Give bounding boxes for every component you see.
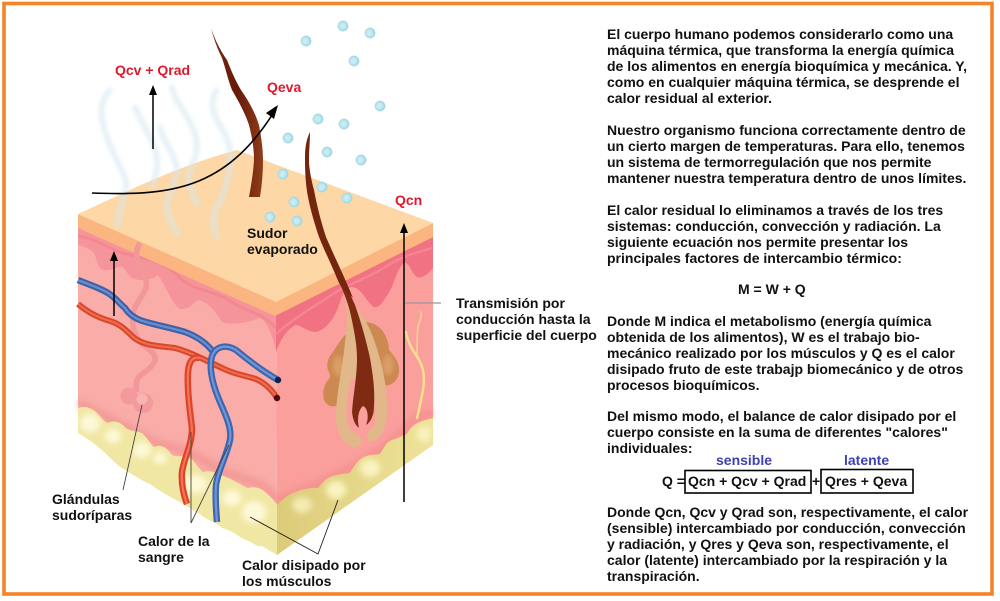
blood vessels: vein [78, 280, 281, 522]
label: Glándulas sudoríparas: Glándulas [52, 491, 120, 507]
text block: definitions: calor (latente) intercambiado por la respiración y la [607, 552, 947, 568]
arrow: Qcv + Qrad [149, 85, 157, 149]
equation: M = W + Q: M = W + Q [738, 281, 806, 297]
root sheath [336, 298, 387, 447]
arrow: internal heat [110, 251, 118, 316]
text block: heat balance: Del mismo modo, el balance de calor disipado por el [607, 408, 956, 424]
text block: metabolism: mecánico realizado por los músculos y Q es el calor [607, 345, 955, 361]
text block: intro: como en cualquier máquina térmica, se desprende el [607, 74, 959, 90]
text block: residual heat: principales factores de intercambio térmico: [607, 250, 902, 266]
text block: definitions: y radiación, y Qres y Qeva son, respectivamente, el [607, 536, 949, 552]
label: Qcn: Qcn [395, 192, 422, 208]
text block: metabolism: obtenida de los alimentos), W es el trabajo bio- [607, 329, 920, 345]
hair shaft right [305, 132, 353, 298]
top surface [78, 150, 433, 302]
text block: thermoregulation: Nuestro organismo funciona correctamente dentro de [607, 122, 966, 138]
sweat droplets [265, 21, 385, 226]
text block: heat balance: cuerpo consiste en la suma de diferentes "calores" [607, 424, 948, 440]
hair inside follicle [336, 276, 374, 428]
text block: metabolism: Donde M indica el metabolismo (energía química [607, 313, 931, 329]
heat waves [102, 87, 230, 237]
label: Transmisión: conducción hasta la [456, 311, 591, 327]
text block: residual heat: sistemas: conducción, convección y radiación. La [607, 218, 941, 234]
text block: thermoregulation: un cierto margen de temperaturas. Para ello, tenemos [607, 138, 965, 154]
label: Transmisión: Transmisión por [456, 295, 565, 311]
fat layer right [277, 418, 433, 555]
text block: residual heat: siguiente ecuación nos permite presentar los [607, 234, 908, 250]
nerve [406, 312, 424, 418]
label: Glándulas sudoríparas: sudoríparas [52, 507, 132, 523]
label: Calor disipado: Calor disipado por [242, 557, 366, 573]
text block: residual heat: El calor residual lo eliminamos a través de los tres [607, 202, 943, 218]
label: Calor de la sangre: Calor de la [138, 533, 210, 549]
text block: definitions: (sensible) intercambiado por conducción, convección [607, 520, 966, 536]
label: Calor disipado: los músculos [242, 573, 332, 589]
label: Qcv + Qrad: Qcv + Qrad [115, 62, 190, 78]
sweat gland [120, 243, 155, 413]
text block: intro: de los alimentos en energía bioquímica y mecánica. Y, [607, 58, 967, 74]
text block: metabolism: procesos bioquímicos. [607, 377, 759, 393]
arrow: Qcn [400, 223, 408, 502]
leader lines [123, 303, 441, 554]
hair follicle [323, 276, 399, 447]
dermis right face [276, 235, 433, 520]
equation: Q balance: sensible [716, 452, 772, 468]
text block: heat balance: individuales: [607, 440, 693, 456]
equation: Q balance: Qcn + Qcv + Qrad [688, 473, 806, 489]
text block: thermoregulation: mantener nuestra temperatura dentro de unos límites. [607, 170, 966, 186]
label: Transmisión: superficie del cuerpo [456, 327, 597, 343]
equation: Q balance: Qres + Qeva [825, 473, 907, 489]
sebaceous gland right [365, 322, 399, 385]
label: Qeva: Qeva [267, 79, 301, 95]
blood vessels: artery [78, 304, 277, 504]
papillary layer left [78, 226, 276, 350]
equation: Q balance [662, 452, 913, 493]
text block: definitions: transpiración. [607, 568, 700, 584]
papillary layer right [276, 237, 433, 352]
label: Sudor evaporado: Sudor [247, 225, 287, 241]
epidermis band [78, 214, 433, 316]
dermis shading above fat [78, 403, 433, 500]
fat layer left [78, 407, 277, 555]
label: Sudor evaporado: evaporado [247, 241, 318, 257]
text block: definitions: Donde Qcn, Qcv y Qrad son, respectivamente, el calor [607, 504, 968, 520]
equation: Q balance: Q = [662, 473, 685, 489]
dermis left face [78, 225, 277, 520]
text block: intro: máquina térmica, que transforma la energía química [607, 42, 954, 58]
text block: thermoregulation: un sistema de termorregulación que nos permite [607, 154, 932, 170]
text block: intro: calor residual al exterior. [607, 90, 772, 106]
sebaceous gland left [323, 332, 352, 406]
equation: Q balance: latente [844, 452, 889, 468]
text block: metabolism: disipado fruto de este trabajp biomecánico y de otros [607, 361, 964, 377]
arrow: Qeva curve [92, 105, 278, 194]
label: Calor de la sangre: sangre [138, 549, 184, 565]
text block: intro: El cuerpo humano podemos considerarlo como una [607, 26, 953, 42]
hair shaft left [211, 28, 263, 197]
equation: Q balance: + [812, 473, 820, 489]
skin block illustration [78, 21, 433, 555]
